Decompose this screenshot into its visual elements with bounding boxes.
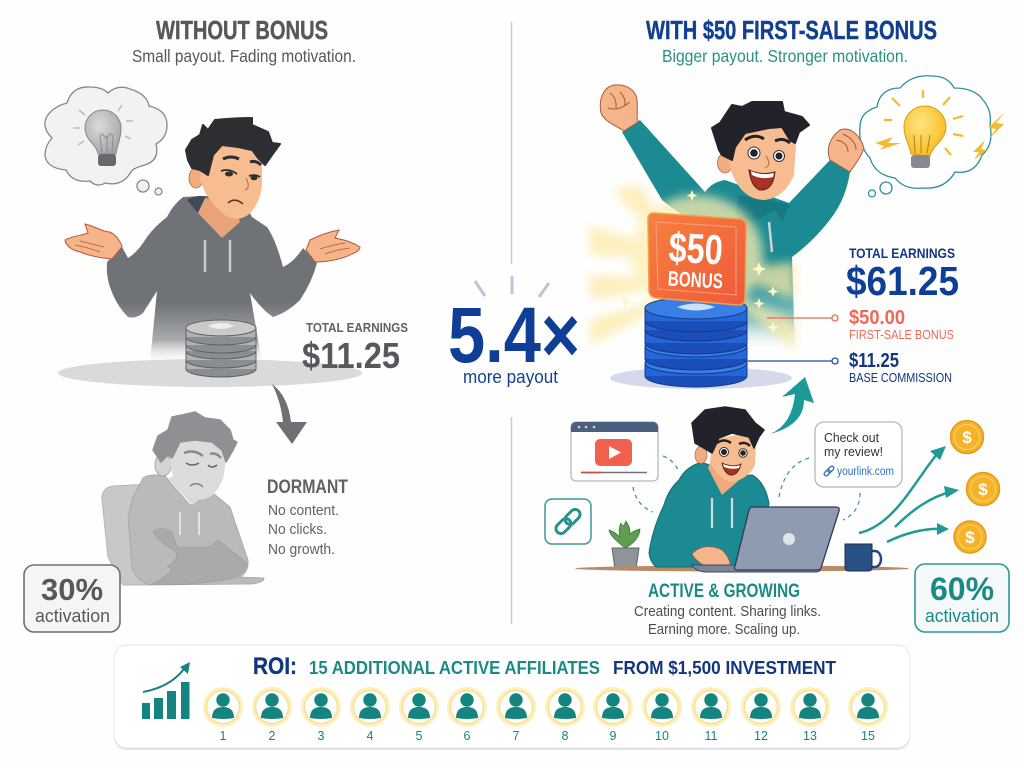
stat box: 30% activation: activation [35,606,110,626]
badge: $50 bonus: BONUS [667,268,723,293]
heading: without bonus: WITHOUT BONUS [156,15,328,45]
line item: $50 first-sale bonus [849,307,954,342]
illustration: person working on laptop [649,407,769,567]
callout: 5.4x more payout [448,276,580,387]
badge: $50 bonus [648,213,746,305]
affiliate numbers: 10 [655,729,669,743]
heading: ROI: ROI: [253,653,297,680]
icon: dollar coins: $ [965,528,975,547]
affiliate numbers: 4 [367,729,374,743]
earnings: without bonus: $11.25 [302,335,400,376]
illustration: celebrating person [600,85,864,352]
stat box: 60% activation [915,564,1009,632]
callout: check out my review: Check out [824,430,879,445]
icon: small silver coin stack [186,320,256,377]
dashed connectors [633,456,860,520]
line item: $50 first-sale bonus: $50.00 [849,307,905,329]
earnings: without bonus: TOTAL EARNINGS [306,320,408,335]
subheading: with bonus: Bigger payout. Stronger motivation. [662,46,908,66]
icon: dollar coins [950,420,1000,553]
panel: ROI [114,645,910,750]
illustration: dormant person with crossed arms [102,412,264,585]
panel: without bonus [24,15,408,632]
line item: $11.25 base commission: $11.25 [849,350,899,372]
stat box: 60% activation: 60% [930,571,994,607]
panel: with bonus [545,15,1009,638]
affiliate numbers: 9 [610,729,617,743]
affiliate numbers: 11 [705,729,718,743]
icon: link box [545,499,591,544]
icon: bright thought cloud with bulb [860,76,1005,197]
text block: active and growing: Creating content. Sharing links. [634,604,821,620]
callout: 5.4x more payout: 5.4× [448,290,580,379]
burst glow behind bonus [590,185,795,350]
line item: $11.25 base commission [849,350,952,385]
affiliate numbers: 5 [416,729,423,743]
text block: active and growing: Earning more. Scaling up. [648,622,800,638]
icon: blue coin stack [645,297,747,387]
illustration: plant [609,521,640,569]
heading: with bonus: WITH $50 FIRST-SALE BONUS [646,15,937,45]
affiliate numbers: 7 [513,729,520,743]
stat box: 60% activation: activation [925,606,999,626]
text block: dormant: No content. [268,503,339,519]
shadow under blue coins [610,367,792,389]
earnings: with bonus: $61.25 [846,258,959,304]
heading: ROI: FROM $1,500 INVESTMENT [613,657,837,678]
affiliate numbers: 1 [220,729,227,743]
affiliate numbers: 8 [562,729,569,743]
icon: dim thought cloud with bulb [45,87,167,195]
heading: ROI [253,653,837,680]
line item: $11.25 base commission: BASE COMMISSION [849,370,952,385]
illustration: laptop [692,507,839,572]
icon: mug [845,544,881,571]
callout: check out my review: my review! [824,444,883,459]
earnings: with bonus: TOTAL EARNINGS [849,245,955,261]
callout: 5.4x more payout: more payout [463,367,558,387]
text block: dormant: DORMANT [267,477,348,498]
text block: dormant: No growth. [268,542,335,558]
affiliate numbers: 2 [269,729,276,743]
callout: check out my review [815,422,902,487]
heading: ROI: 15 ADDITIONAL ACTIVE AFFILIATES [309,657,600,678]
badge: $50 bonus: $50 [668,224,724,273]
illustration: disappointed person shrugging [65,118,360,362]
affiliate numbers: 13 [803,729,817,743]
icon: dollar coins: $ [962,428,972,447]
icon: video window [571,422,658,481]
icon: growth chart [142,662,190,719]
connector: base commission [747,358,838,364]
sparkles [620,190,778,333]
stat box: 30% activation: 30% [41,572,103,607]
icons: affiliates row [205,689,886,725]
stat box: 30% activation [24,565,120,632]
arrow: down to dormant [272,384,307,444]
subheading: without bonus: Small payout. Fading motivation. [132,46,356,66]
affiliate numbers: 3 [318,729,325,743]
affiliate numbers: 12 [754,729,768,743]
affiliate numbers [220,729,875,743]
center divider lower [510,417,512,624]
center divider upper [510,22,512,264]
text block: dormant: No clicks. [268,522,327,538]
table shadow [58,359,362,387]
text block: dormant [267,477,348,558]
icon: dollar coins: $ [978,480,988,499]
arrow: growth back to earnings [770,377,814,434]
affiliate numbers: 15 [861,729,875,743]
arrows to coins [859,446,959,542]
text block: active and growing: ACTIVE & GROWING [648,581,800,602]
text block: active and growing [634,581,821,638]
desk [575,566,909,572]
connector: first-sale bonus [767,315,838,321]
callout: check out my review: yourlink.com [837,466,894,478]
affiliate numbers: 6 [464,729,471,743]
line item: $50 first-sale bonus: FIRST-SALE BONUS [849,327,954,342]
